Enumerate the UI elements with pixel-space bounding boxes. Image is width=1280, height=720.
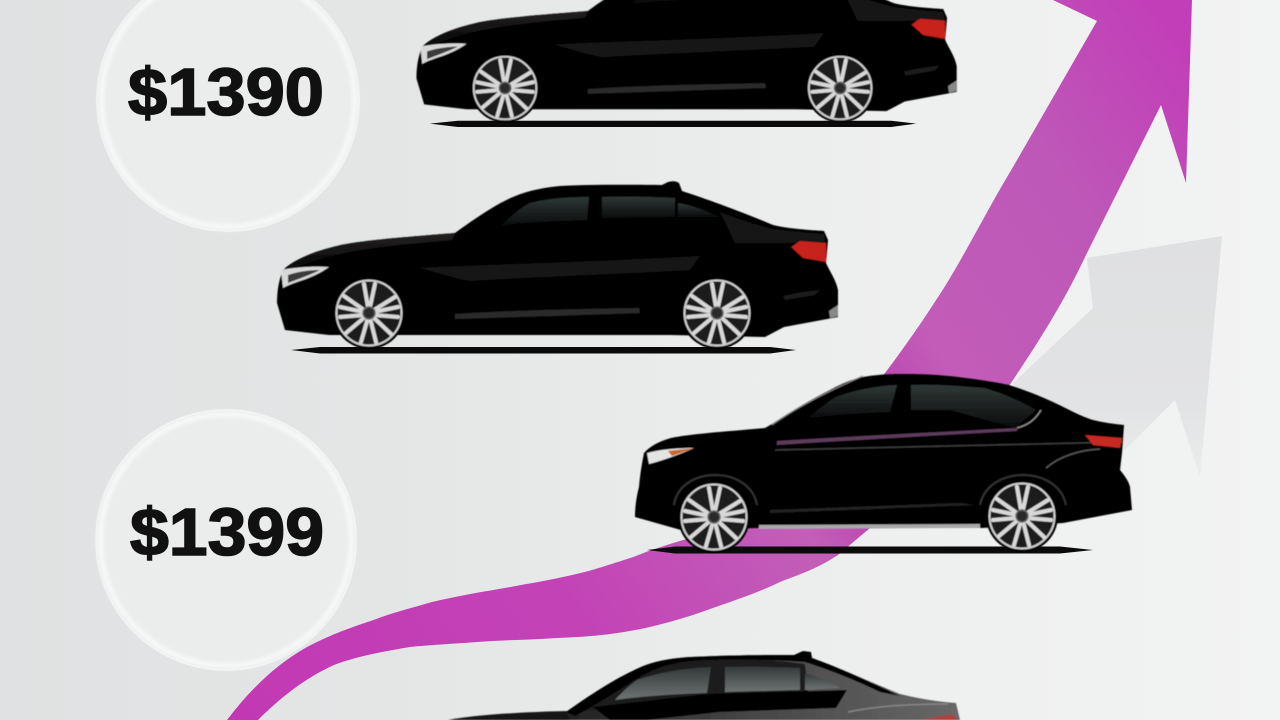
price circle: $1399 [96,410,356,670]
price: $1390: $1390 [128,55,324,130]
car 3: black coupe SUV [635,374,1132,554]
car 1: black sedan, top [416,0,957,127]
price: $1399: $1399 [130,495,324,570]
price circle: $1390 [97,0,359,231]
rising purple arrow [227,0,1192,720]
ghost arrow shadow [1013,236,1222,477]
car 4: dark grey sedan, bottom [448,651,960,720]
car 2: black sedan [277,181,838,354]
